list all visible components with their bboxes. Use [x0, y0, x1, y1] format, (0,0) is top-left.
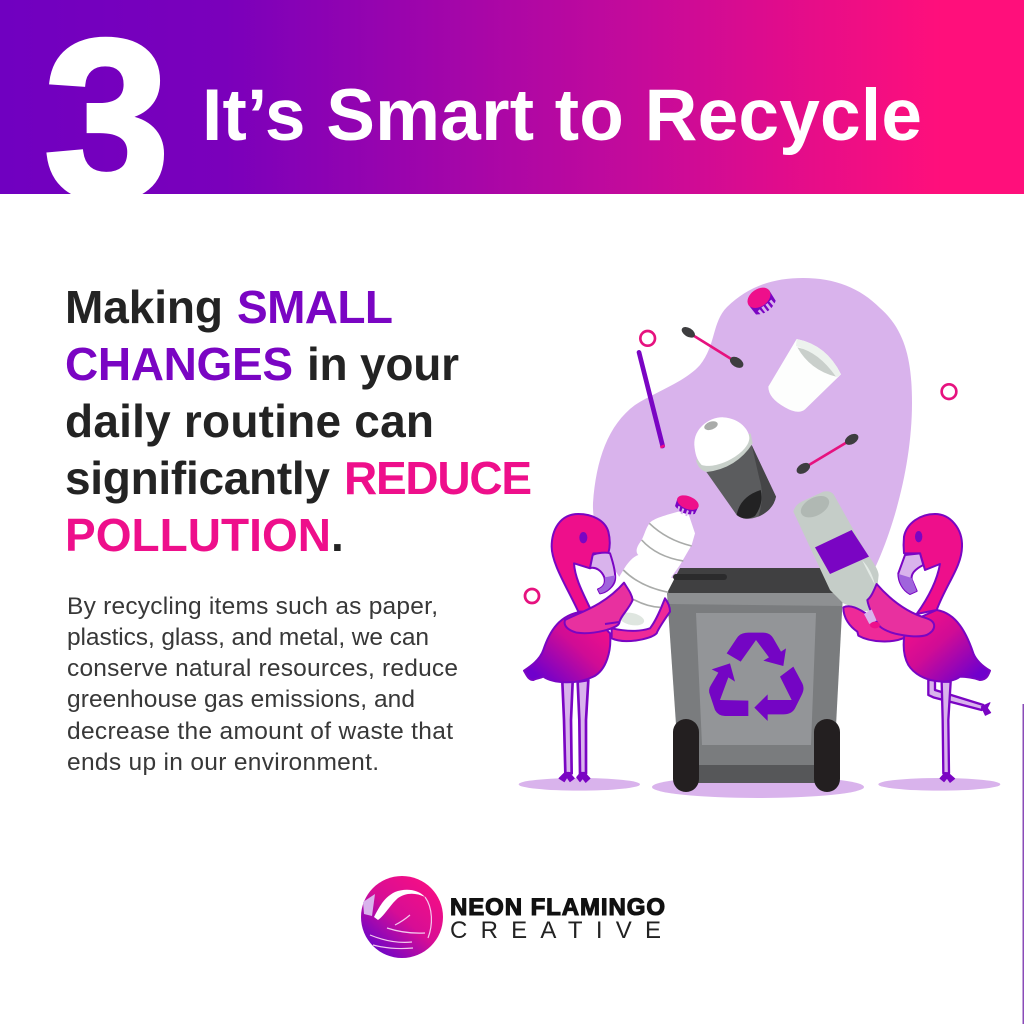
floating recyclables [639, 283, 956, 519]
recycling bin [667, 568, 843, 792]
body paragraph [67, 593, 458, 776]
headline: SMALL [237, 281, 393, 333]
icon: ring [942, 384, 956, 399]
flamingo legs [928, 680, 983, 773]
flamingo beak [898, 553, 923, 594]
bottle neck and lid [864, 609, 880, 628]
body paragraph: By recycling items such as paper, [67, 593, 438, 620]
header banner [0, 0, 1024, 194]
icon: bottle lid [673, 492, 701, 519]
flamingo shadow [878, 778, 1000, 791]
logo wordmark: NEON FLAMINGO [450, 894, 665, 921]
icon: bottle cap [744, 283, 779, 319]
illustration background blob [593, 278, 912, 578]
flamingo far wing [843, 606, 907, 641]
headline: . [331, 509, 344, 561]
headline: POLLUTION [65, 509, 331, 561]
plastic water bottle [618, 492, 701, 628]
flamingo feet [559, 772, 590, 782]
flamingo far wing [612, 598, 670, 641]
headline: CHANGES [65, 338, 293, 390]
body paragraph: decrease the amount of waste that [67, 718, 453, 745]
icon: paper cup [768, 339, 841, 412]
bin shadow [652, 776, 864, 798]
icon: drinking straw [639, 352, 663, 448]
icon: reusable tumbler [694, 417, 776, 519]
flamingo near wing [867, 584, 934, 636]
flamingo legs [562, 680, 588, 773]
left flamingo [519, 514, 670, 791]
headline: in your [307, 338, 459, 390]
headline [65, 281, 532, 561]
flamingo head and neck [903, 514, 962, 614]
logo emblem [361, 876, 443, 958]
bin lid [667, 568, 836, 593]
flamingo body [524, 612, 610, 682]
headline: significantly [65, 452, 330, 504]
bin label panel [696, 613, 816, 745]
flamingo near wing [565, 583, 633, 633]
body paragraph: plastics, glass, and metal, we can [67, 624, 429, 651]
headline: daily routine can [65, 395, 434, 447]
flamingo eye [579, 532, 587, 543]
headline: Making [65, 281, 223, 333]
bin body [667, 593, 843, 783]
headline: REDUCE [344, 452, 532, 504]
bin wheels [673, 719, 699, 792]
flamingo feet [940, 703, 991, 782]
body paragraph: greenhouse gas emissions, and [67, 686, 415, 713]
flamingo body [904, 610, 990, 681]
icon: recycling symbol [709, 633, 804, 721]
flamingo eye [915, 531, 922, 542]
body paragraph: ends up in our environment. [67, 749, 379, 776]
body paragraph: conserve natural resources, reduce [67, 655, 458, 682]
small ring by flamingo [525, 589, 539, 603]
right flamingo [843, 514, 1000, 791]
icon: cotton swab [795, 432, 860, 476]
flamingo beak [590, 553, 615, 593]
logo subtitle: CREATIVE [450, 917, 661, 944]
icon: cotton swab [680, 325, 745, 370]
icon: ring [640, 331, 655, 346]
flamingo shadow [519, 778, 640, 791]
flamingo head and neck [552, 514, 610, 612]
title: It’s Smart to Recycle [202, 75, 922, 156]
glass bottle [793, 491, 879, 612]
logo [361, 876, 665, 958]
